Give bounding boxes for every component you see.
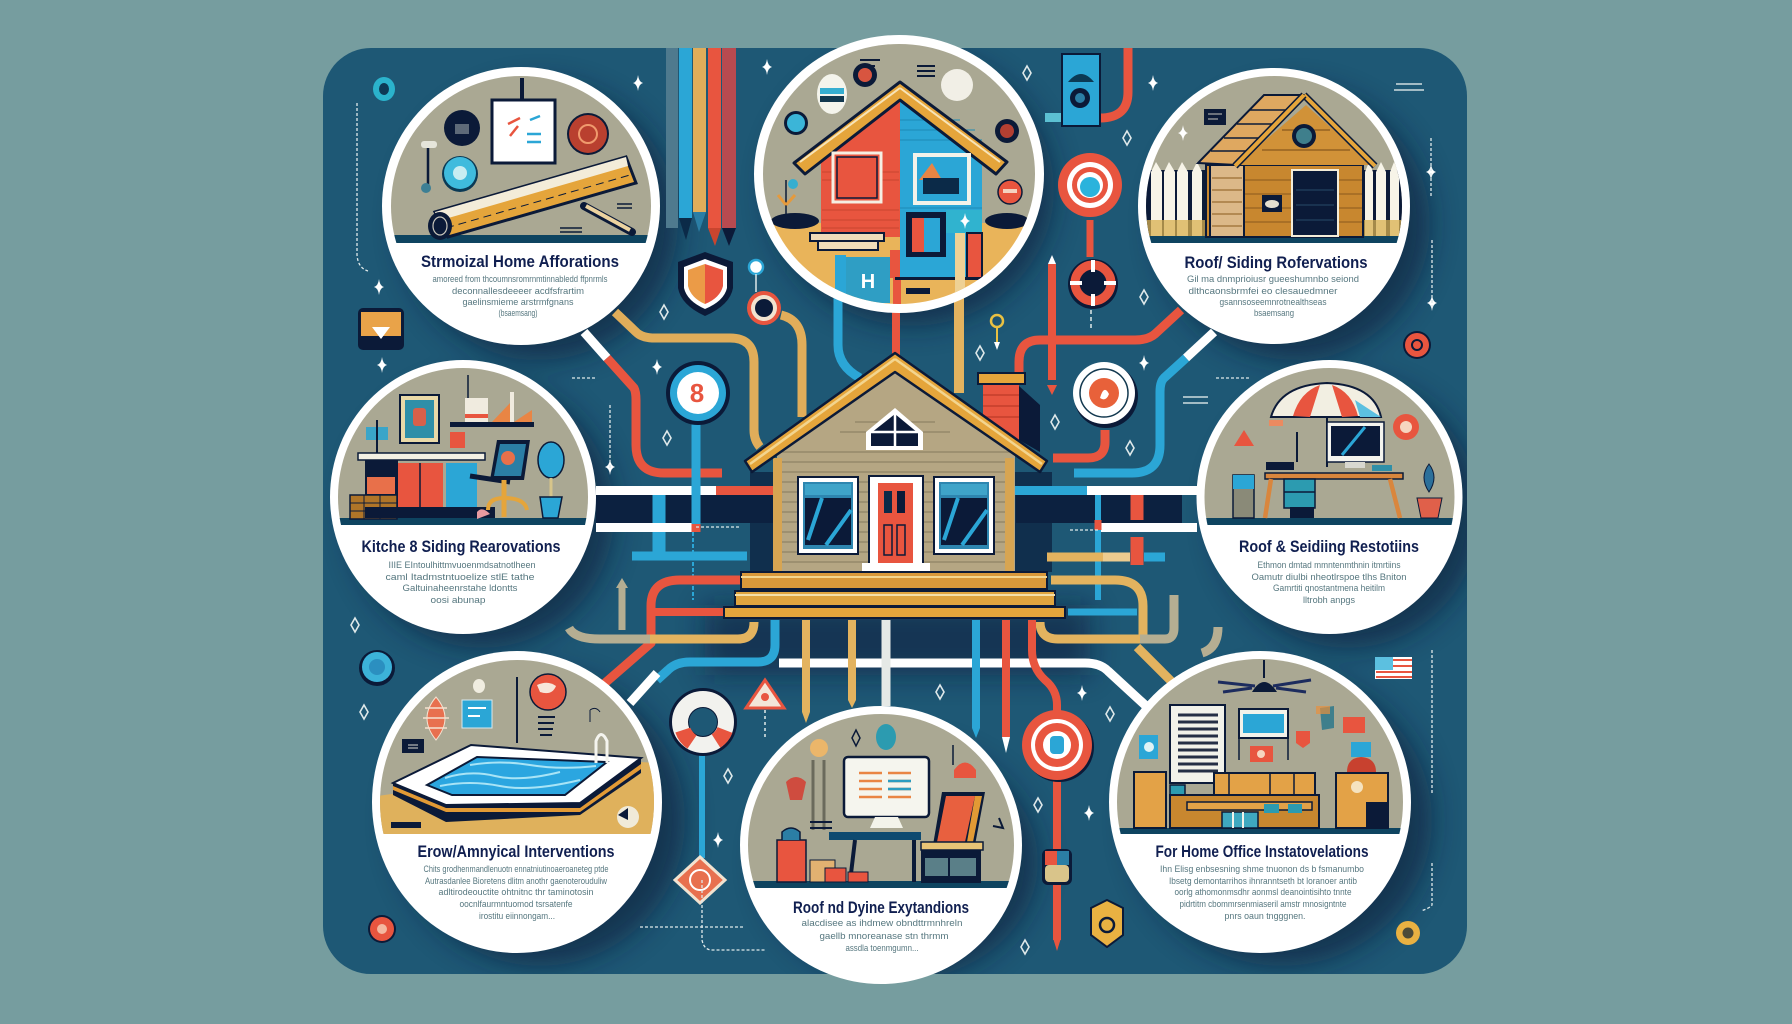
body text: amoreed from thcoumnsromrnmtinnabledd ffpnrmls (432, 274, 608, 285)
body text: oocnlfaurmntuomod tsrsatenfe (460, 899, 572, 910)
icon: lifebuoy top (1068, 259, 1118, 330)
body text: Galtuinaheenrstahe ldontts (402, 583, 518, 594)
pipes below deck (630, 620, 1145, 940)
body text: Ihn Elisg enbsesning shme tnuonon ds b fsmanumbo (1160, 864, 1364, 875)
roof (745, 353, 1047, 472)
body text: Chits grodhenmandlenuotn ennatniutinoaeroaneteg ptde (424, 864, 608, 875)
icon: yellow ring (1396, 921, 1420, 945)
left window (798, 477, 858, 554)
deck steps (724, 572, 1065, 618)
body text: dlthcaonsbrmfei eo clesauedmner (1188, 286, 1338, 297)
body text: Autrasdanlee Bioretens dlitm anothr gaenoterouduliw (425, 876, 607, 887)
body text (1252, 560, 1406, 606)
title: Kitche 8 Siding Rearovations (362, 538, 560, 556)
title: For Home Office Instatovelations (1156, 843, 1368, 861)
gable window (866, 408, 923, 450)
icon: lifebuoy bottom (669, 688, 737, 756)
body text (386, 560, 536, 606)
main panel (323, 48, 1467, 974)
body text (424, 864, 608, 922)
icon: red badge lower left (368, 915, 396, 943)
icon: blue camera device (1045, 53, 1101, 127)
icon: flag (1375, 657, 1412, 679)
body text: gsannsoseemnrotnealthseas (1220, 297, 1327, 308)
dark bands behind connector bars (596, 472, 1182, 572)
pipe tips (802, 700, 1061, 951)
body text: caml Itadmstntuoelize stlE tathe (386, 572, 534, 583)
icon: yellow key ring (991, 315, 1003, 350)
panel: top house: H (861, 271, 875, 293)
icon: red badge right (1403, 331, 1431, 359)
icon: top-left ring (373, 77, 395, 101)
icon: bullseye target (1058, 153, 1122, 217)
body text: bsaemsang (1254, 308, 1294, 319)
title: Erow/Amnyical Interventions (418, 843, 614, 861)
connector bars: right (1015, 490, 1218, 682)
body text: oosi abunap (430, 595, 486, 606)
body text: Ethmon dmtad mmntenmthnin itmrtiins (1258, 560, 1401, 571)
icon: bottom target (1022, 710, 1094, 782)
title: Roof & Seidiing Restotiins (1239, 538, 1419, 556)
icon: right target (1073, 362, 1138, 428)
body text: gaelinsmieme arstrmfgnans (462, 297, 574, 308)
body text: oorlg athomonmsdhr aonmsl deanointisihto tnnte (1174, 887, 1352, 898)
icon: diamond badge (675, 857, 725, 903)
body text: (bsaemsang) (498, 308, 538, 319)
body text: pnrs oaun tngggnen. (1224, 911, 1306, 922)
panel: Roof and Spine Extensions (740, 700, 1030, 984)
panel: Structural Home Alterations (380, 60, 660, 345)
body text (432, 274, 608, 319)
connector bars: left (569, 424, 775, 683)
house walls (773, 366, 1015, 574)
body text: deconnallesdeeeer acdfsfrartim (452, 286, 584, 297)
icon: blue ring left (359, 650, 395, 686)
body text: pidrtitm cbommrsenmiaseril amstr mnosigntnte (1180, 899, 1346, 910)
body text (802, 918, 962, 954)
body text: Gil ma dnmprioiusr gueeshumnbo seiond (1187, 274, 1359, 285)
panel: Roof and Siding Renovations top (1138, 60, 1410, 344)
icon: ring on stem (747, 260, 781, 325)
pipes: upper left (584, 262, 959, 473)
body text: Gamrtiti qnostantmena heitilm (1273, 583, 1385, 594)
icon: warning triangle (746, 680, 784, 740)
icon: envelope (358, 308, 404, 350)
body text: adltirodeouctite ohtnitnc thr taminotosin (438, 887, 594, 898)
title: Roof nd Dyine Exytandions (793, 899, 969, 917)
icon: yellow badge (1091, 900, 1123, 947)
title: Roof/ Siding Rofervations (1184, 254, 1368, 272)
house (724, 353, 1065, 618)
body text (1187, 274, 1359, 319)
body text: irostitu eiinnongam... (479, 911, 555, 922)
panel: Roof and Siding Renovations right (1195, 360, 1465, 634)
chimney (978, 373, 1040, 452)
panel: top house (750, 30, 1050, 317)
circle shadows (350, 54, 1480, 980)
body text: Ibsetg demontarrihos ihnranntseth bt loranoer antib (1169, 876, 1357, 887)
panel: Pool additions (370, 650, 670, 953)
body text: IIIE EIntoulhittmvuoenmdsatnotlheen (388, 560, 536, 571)
panel: Kitchen and Siding Renovations (330, 360, 600, 634)
title: Strmoizal Home Afforations (421, 253, 619, 271)
body text: alacdisee as ihdmew obndttrmnhreln (802, 918, 962, 929)
pipes: upper right (1019, 48, 1214, 473)
body text: lltrobh anpgs (1303, 595, 1355, 606)
panel: Home Office Installations (1105, 650, 1415, 953)
icon: gauge 8 (666, 361, 730, 425)
icon: pipe device (1042, 849, 1072, 885)
decorative stars and dashes (351, 59, 1437, 954)
icon: gauge 8: 8 (690, 378, 704, 408)
body text: assdla toenmgumn... (846, 943, 918, 954)
body text (1160, 864, 1364, 922)
body text: gaellb mnoreanase stn thrmm (820, 931, 949, 942)
door (862, 476, 930, 571)
icon: shield (678, 252, 733, 316)
pencils (666, 48, 736, 246)
body text: Oamutr diulbi nheotlrspoe tlhs Bniton (1252, 572, 1406, 583)
right window (934, 477, 994, 554)
